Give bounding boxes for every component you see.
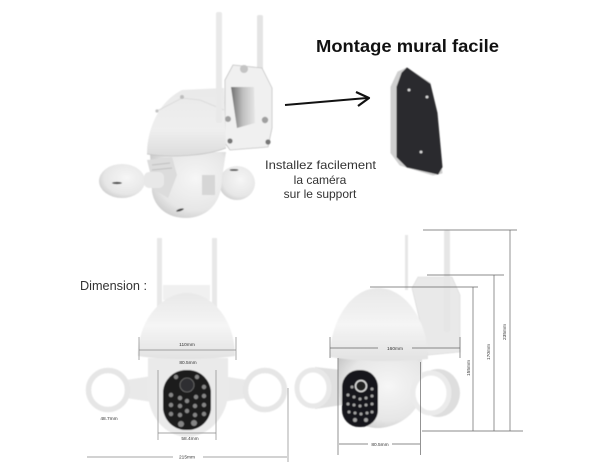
front view dimension labels (100, 342, 199, 460)
speaker grille (202, 175, 215, 195)
front view dimension labels: 58.4mm (181, 436, 199, 442)
camera with open wall bracket (99, 12, 272, 218)
front view dimension labels: 80.5mm (179, 360, 197, 366)
side lights (88, 370, 284, 410)
antenna: right (257, 15, 263, 71)
back light (219, 166, 255, 200)
three quarter view dimension labels: 160mm (387, 346, 403, 352)
wall bracket (225, 65, 272, 150)
dimension heading: Dimension : (80, 279, 147, 293)
back light slot (230, 169, 238, 171)
instructions text: sur le support (284, 187, 357, 201)
right light (413, 369, 460, 417)
body (338, 358, 422, 428)
left light (297, 367, 342, 409)
arrow (285, 92, 369, 106)
antenna: left (216, 12, 222, 123)
body (148, 358, 228, 437)
three quarter view dimension labels: 235mm (502, 324, 508, 340)
dome (330, 288, 428, 361)
dome with bracket arm (147, 88, 226, 156)
front light (99, 164, 145, 198)
three quarter view camera (297, 230, 460, 428)
swivel ball and collar (150, 152, 226, 218)
front view dimension labels: 110mm (179, 342, 195, 348)
antennas (405, 235, 408, 290)
rear bracket (163, 285, 210, 300)
instructions text: la caméra (294, 173, 347, 187)
three quarter view dimension labels: 80.5mm (371, 442, 389, 448)
three quarter view dimension labels: 170mm (486, 344, 492, 360)
mounting hinge (147, 157, 177, 198)
dome (138, 293, 235, 359)
front view camera (88, 238, 284, 437)
three quarter view dimension lines (330, 230, 523, 455)
lens panel with LEDs (163, 370, 211, 430)
three quarter view dimension labels (371, 324, 508, 448)
front view dimension labels: 215mm (179, 454, 195, 460)
instructions text (265, 158, 377, 201)
antennas (157, 238, 217, 310)
antenna: front (444, 230, 450, 332)
three quarter view dimension labels: 155mm (466, 360, 472, 376)
wall bracket (412, 277, 460, 355)
adhesive mounting pad (391, 68, 442, 175)
title: Montage mural facile (316, 36, 499, 56)
front view dimension lines (87, 337, 288, 462)
lens panel with LEDs (342, 370, 378, 427)
instructions text: Installez facilement (265, 158, 377, 172)
front view dimension labels: 48.7mm (100, 416, 118, 422)
